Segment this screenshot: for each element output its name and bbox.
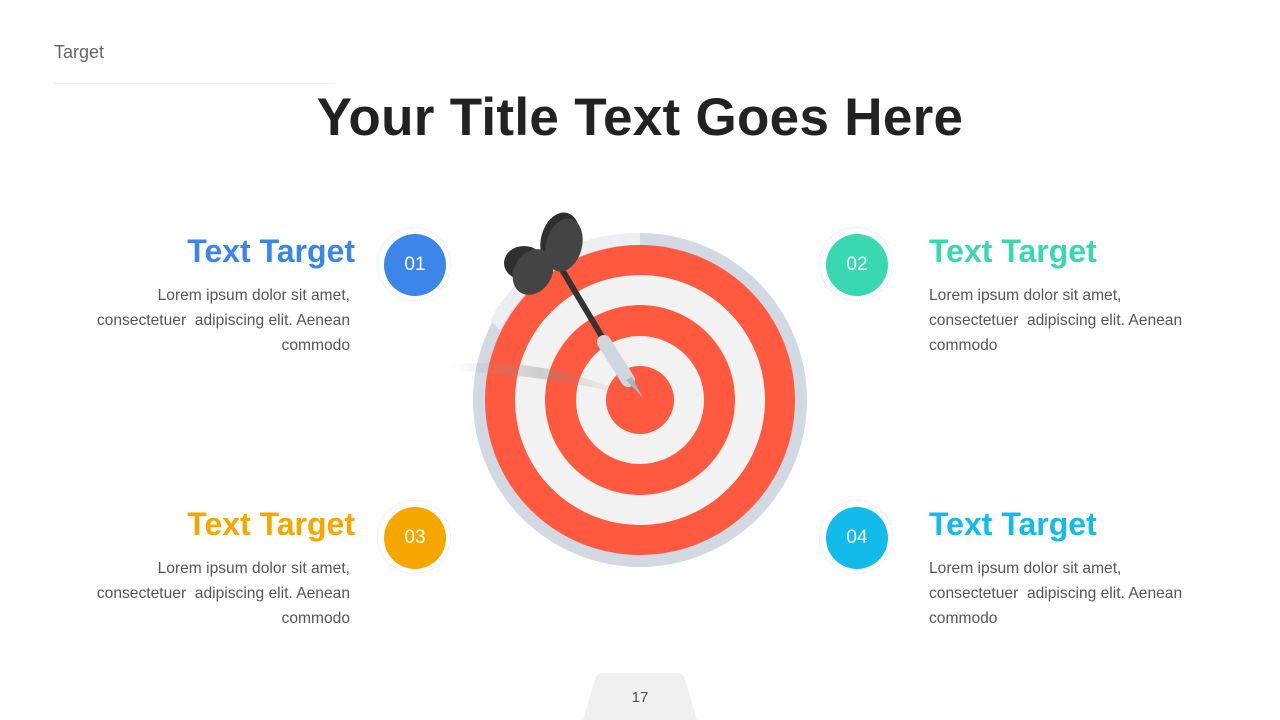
section label: Target	[54, 42, 104, 62]
heading 01: Text Target	[187, 233, 355, 269]
text 02: Lorem ipsum dolor sit amet, consectetuer adipiscing elit. Aenean commodo	[929, 287, 1182, 354]
page number tab: 17	[632, 689, 648, 706]
text 04: Lorem ipsum dolor sit amet, consectetuer adipiscing elit. Aenean commodo	[929, 560, 1182, 627]
badge 03: 03	[404, 527, 426, 548]
badge 01: 01	[404, 254, 426, 275]
badge 04	[819, 500, 893, 574]
item 04	[819, 500, 1182, 627]
heading 02: Text Target	[929, 233, 1097, 269]
item 01	[97, 227, 451, 354]
badge 02: 02	[846, 254, 868, 275]
badge 04: 04	[846, 527, 868, 548]
motion shadow	[450, 363, 630, 395]
text 01: Lorem ipsum dolor sit amet, consectetuer adipiscing elit. Aenean commodo	[97, 287, 350, 354]
dart	[504, 208, 643, 398]
target with dart	[470, 212, 807, 567]
badge 02	[819, 227, 893, 301]
target board	[473, 233, 807, 567]
text 03: Lorem ipsum dolor sit amet, consectetuer adipiscing elit. Aenean commodo	[97, 560, 350, 627]
heading 03: Text Target	[187, 506, 355, 542]
item 02	[819, 227, 1182, 354]
heading 04: Text Target	[929, 506, 1097, 542]
title: Your Title Text Goes Here	[317, 88, 963, 147]
badge 01	[377, 227, 451, 301]
badge 03	[377, 500, 451, 574]
page number tab	[583, 673, 697, 720]
item 03	[97, 500, 451, 627]
